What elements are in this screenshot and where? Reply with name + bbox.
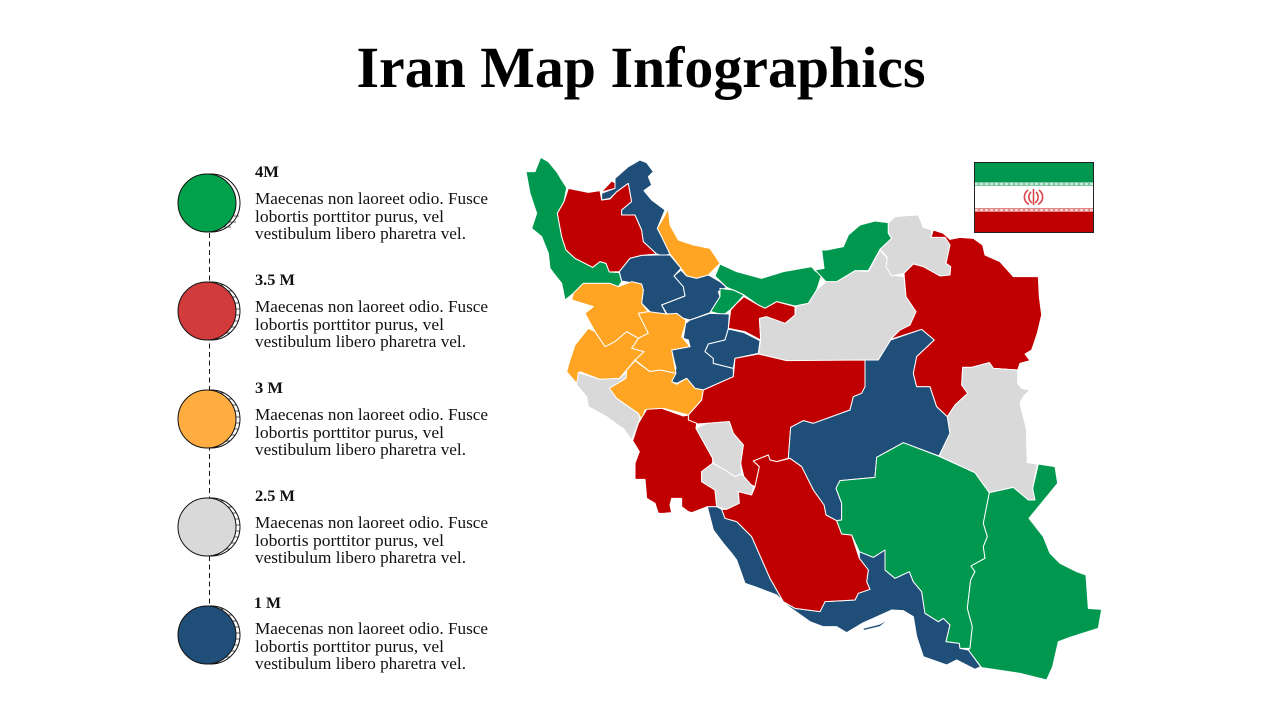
icon: flag of Iran [974, 162, 1094, 232]
legend item: 4M [178, 164, 488, 243]
legend item: 3.5 M [178, 272, 488, 351]
legend timeline [178, 164, 488, 673]
legend item: 1 M: vestibulum libero pharetra vel. [255, 654, 466, 673]
legend item: 2.5 M: Maecenas non laoreet odio. Fusce [255, 513, 488, 532]
legend item: 4M: lobortis porttitor purus, vel [255, 207, 444, 226]
legend item: 3 M: 3 M [255, 380, 283, 397]
legend item: 4M: Maecenas non laoreet odio. Fusce [255, 189, 488, 208]
legend item: 3.5 M: lobortis porttitor purus, vel [255, 315, 444, 334]
legend item: 1 M [178, 595, 488, 673]
legend item: 3.5 M: 3.5 M [255, 272, 295, 289]
legend item: 2.5 M: 2.5 M [255, 488, 295, 505]
map of Iran [526, 157, 1102, 680]
legend item: 4M: 4M [255, 164, 279, 181]
legend item: 2.5 M: vestibulum libero pharetra vel. [255, 548, 466, 567]
title: Iran Map Infographics [356, 35, 926, 100]
legend item: 3 M: lobortis porttitor purus, vel [255, 423, 444, 442]
legend item: 2.5 M: lobortis porttitor purus, vel [255, 531, 444, 550]
legend item: 2.5 M [178, 488, 488, 567]
legend item: 3 M [178, 380, 488, 459]
icon: flag emblem [1024, 189, 1043, 205]
legend item: 1 M: 1 M [254, 595, 281, 612]
legend item: 4M: vestibulum libero pharetra vel. [255, 224, 466, 243]
legend item: 3.5 M: Maecenas non laoreet odio. Fusce [255, 297, 488, 316]
legend item: 1 M: Maecenas non laoreet odio. Fusce [255, 619, 488, 638]
legend item: 1 M: lobortis porttitor purus, vel [255, 637, 444, 656]
legend item: 3 M: Maecenas non laoreet odio. Fusce [255, 405, 488, 424]
legend item: 3.5 M: vestibulum libero pharetra vel. [255, 332, 466, 351]
legend item: 3 M: vestibulum libero pharetra vel. [255, 440, 466, 459]
